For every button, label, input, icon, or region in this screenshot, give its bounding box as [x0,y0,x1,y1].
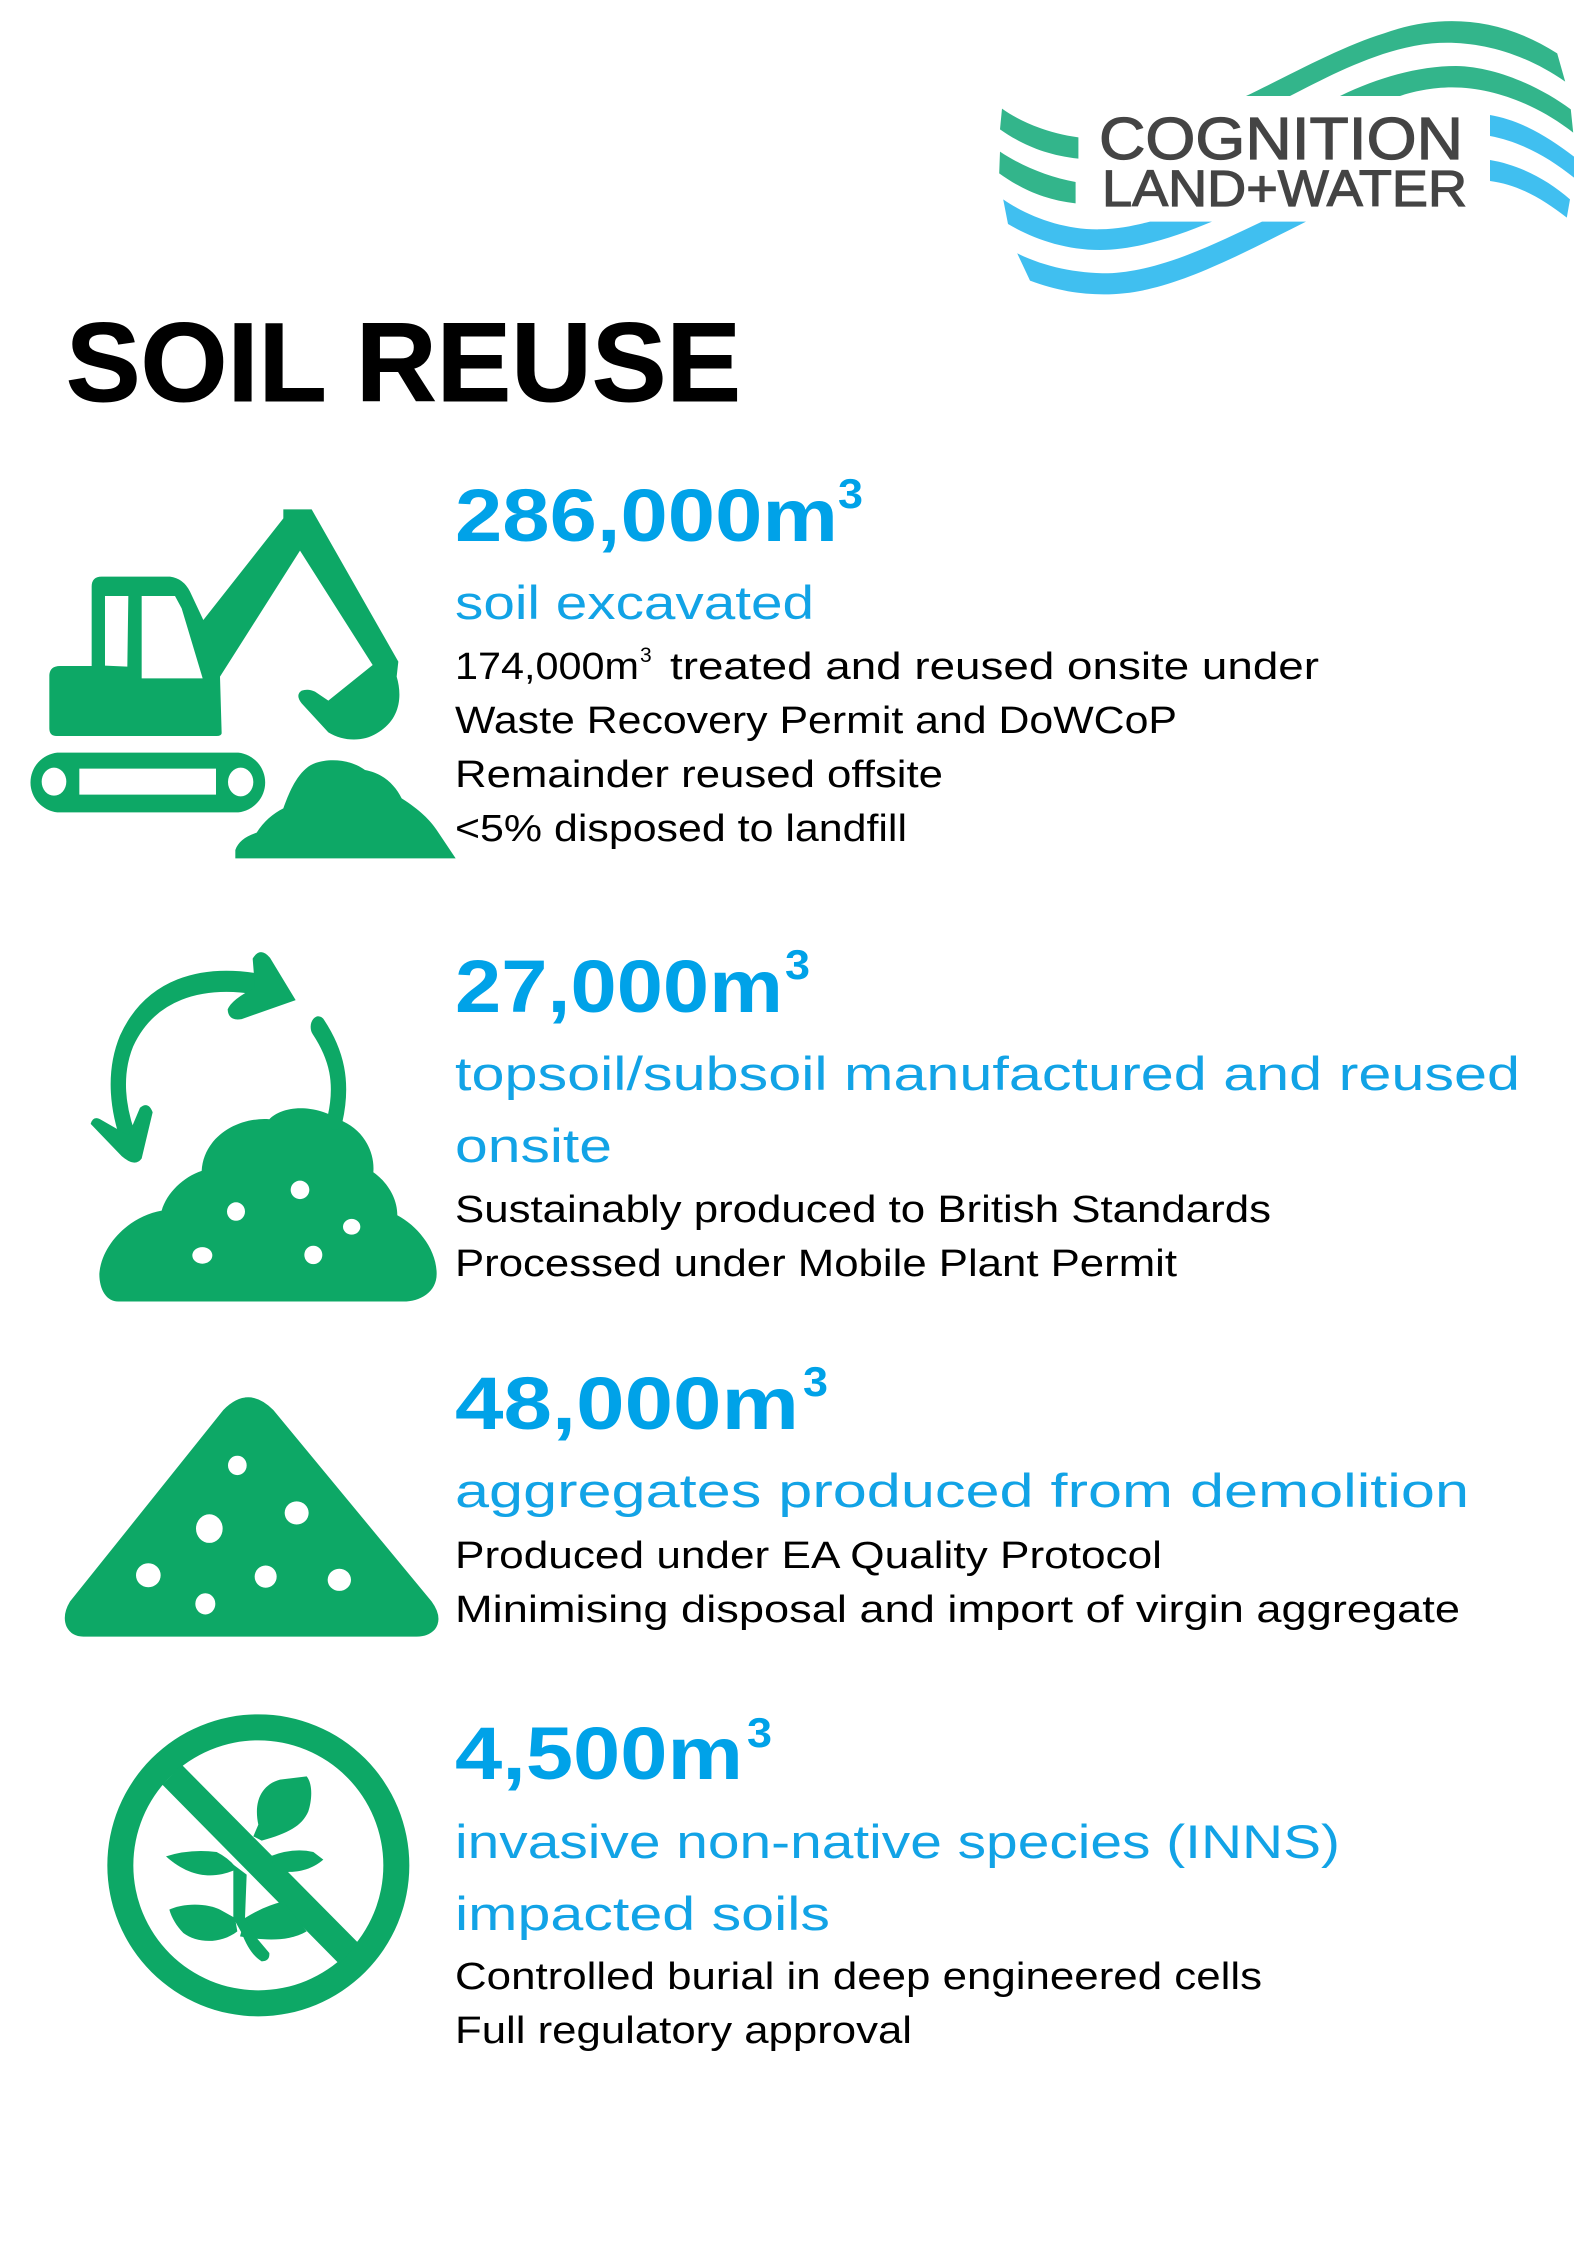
icon: soil pile with recycling arrows [91,952,437,1302]
logo wordmark [1099,106,1467,217]
statistic: 4,500 m3: 3 [747,1709,772,1756]
panel: invasive species soils [107,1709,1340,2052]
details [455,1535,1460,1631]
logo waves [999,21,1574,294]
details: Produced under EA Quality Protocol [455,1535,1162,1577]
statistic: 27,000 m3: 27,000m [455,945,783,1028]
statistic: 48,000 m3: 48,000m [455,1362,799,1445]
logo: Cognition Land+Water [999,21,1574,294]
subtitle: onsite [455,1119,612,1172]
panel: aggregates [65,1358,1469,1637]
logo wordmark: LAND+WATER [1102,160,1467,217]
panel: topsoil and subsoil [91,941,1520,1302]
details: 174,000m [455,646,639,688]
icon: no plant sign [107,1714,409,2016]
statistic: 286,000 m3: 286,000m [455,474,838,557]
details [455,1956,1262,2052]
panel: soil excavated [30,470,1319,858]
details: Minimising disposal and import of virgin aggregate [455,1589,1460,1631]
details [455,1189,1271,1285]
details: Remainder reused offsite [455,754,943,796]
details: Controlled burial in deep engineered cells [455,1956,1262,1998]
details: treated and reused onsite under [670,646,1319,688]
details: Waste Recovery Permit and DoWCoP [455,700,1177,742]
icon: excavator and soil pile [30,509,456,858]
subtitle [455,1047,1520,1172]
details [455,644,1319,850]
statistic: 4,500 m3: 4,500m [455,1712,743,1795]
statistic: 27,000 m3: 3 [785,941,810,988]
subtitle: impacted soils [455,1887,830,1940]
subtitle: soil excavated [455,576,814,629]
details: <5% disposed to landfill [455,808,907,850]
statistic: 48,000 m3: 3 [803,1358,828,1405]
title: SOIL REUSE [66,300,741,425]
logo wordmark: COGNITION [1099,106,1463,172]
details: Sustainably produced to British Standards [455,1189,1271,1231]
subtitle: aggregates produced from demolition [455,1464,1469,1517]
statistic: 286,000 m3: 3 [838,470,863,517]
subtitle: invasive non-native species (INNS) [455,1815,1340,1868]
details: Full regulatory approval [455,2010,912,2052]
details: Processed under Mobile Plant Permit [455,1243,1178,1285]
subtitle: topsoil/subsoil manufactured and reused [455,1047,1520,1100]
icon: aggregate pile [65,1397,438,1637]
details: 3 [640,644,652,667]
subtitle [455,1815,1340,1940]
